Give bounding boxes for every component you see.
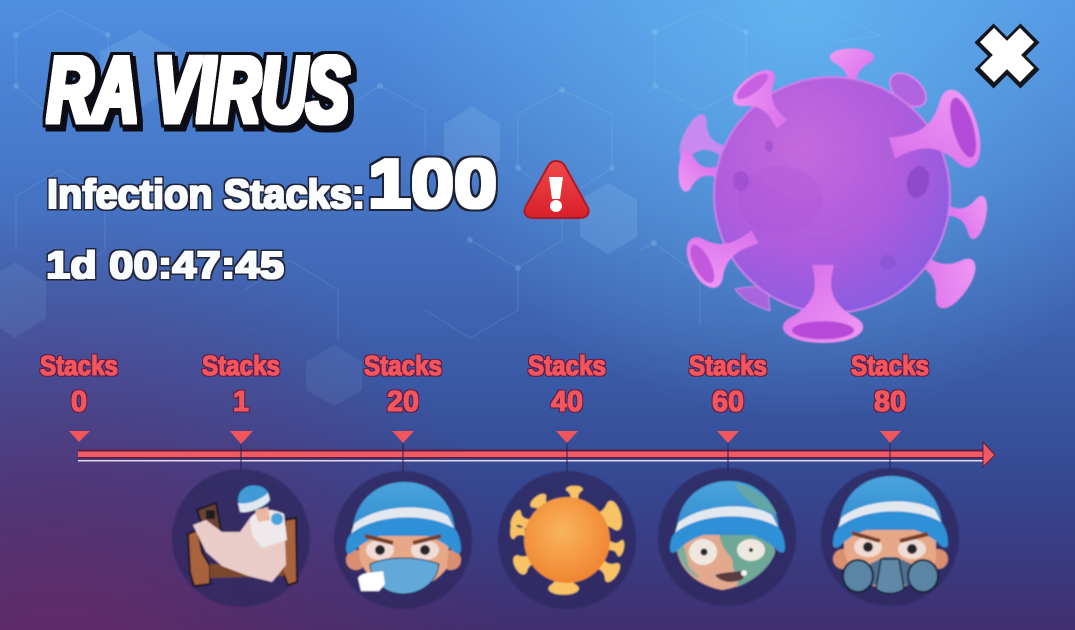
stage marker: stacks 60: Stacks (689, 350, 767, 381)
stage marker: stacks 1 (202, 350, 280, 444)
stage marker: stacks 0 (40, 350, 118, 442)
stage marker: stacks 80: 80 (874, 386, 906, 418)
stage marker: stacks 0: 0 (71, 386, 87, 418)
icon: orange virus (498, 471, 636, 609)
stage marker: stacks 60: 60 (712, 386, 744, 418)
stage marker: stacks 40: 40 (551, 386, 583, 418)
infection stacks value: 100 (368, 146, 497, 222)
stage marker: stacks 40: Stacks (528, 350, 606, 381)
stage marker: stacks 1: Stacks (202, 350, 280, 381)
infection stacks label: Infection Stacks: (47, 171, 365, 217)
virus illustration (674, 48, 991, 343)
icon: zombie soldier (658, 468, 796, 606)
virus body (714, 77, 950, 313)
countdown timer: 1d 00:47:45 (46, 245, 284, 287)
timeline axis (78, 442, 995, 472)
title: RA VIRUS (47, 37, 349, 142)
stage marker: stacks 20: Stacks (364, 350, 442, 381)
stage marker: stacks 80: Stacks (851, 350, 929, 381)
stage marker: stacks 0: Stacks (40, 350, 118, 381)
icon: close button (984, 33, 1030, 79)
stage marker: stacks 40 (528, 350, 606, 443)
stage marker: stacks 20 (364, 350, 442, 443)
icon: soldier in bed (172, 469, 310, 607)
icon: soldier with mask and cough (334, 471, 472, 609)
stage marker: stacks 60 (689, 350, 767, 443)
icon: warning triangle (524, 161, 589, 218)
stage marker: stacks 20: 20 (387, 386, 419, 418)
stage marker: stacks 1: 1 (233, 386, 249, 418)
stage marker: stacks 80 (851, 350, 929, 443)
icon: soldier with gas mask (821, 468, 959, 606)
virus front spikes (680, 64, 988, 343)
